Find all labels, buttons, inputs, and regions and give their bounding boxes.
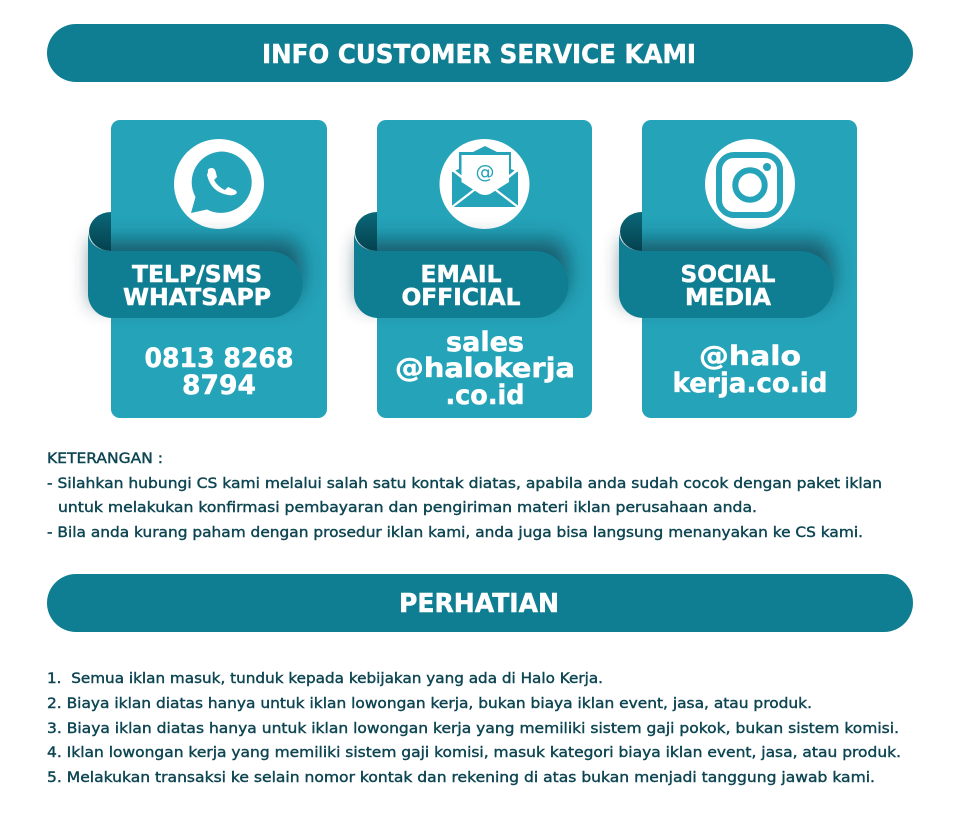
- icon: instagram: [705, 139, 795, 229]
- ribbon: SOCIAL: [680, 262, 776, 288]
- contact text: 0813 8268: [144, 343, 294, 374]
- contact text: kerja.co.id: [672, 368, 828, 399]
- text block: perhatian list: 2. Biaya iklan diatas hanya untuk iklan lowongan kerja, bukan biaya iklan event, jasa, atau produk.: [47, 696, 812, 712]
- panel: telp/sms whatsapp: [88, 120, 327, 418]
- contact text: @halo: [699, 341, 801, 372]
- ribbon: OFFICIAL: [402, 285, 521, 311]
- heading bar: info customer service: INFO CUSTOMER SERVICE KAMI: [262, 40, 696, 70]
- text block: perhatian list: 5. Melakukan transaksi ke selain nomor kontak dan rekening di atas bukan menjadi tanggung jawab kami.: [47, 770, 875, 786]
- ribbon: [354, 212, 568, 318]
- text block: keterangan: - Bila anda kurang paham dengan prosedur iklan kami, anda juga bisa langsung menanyakan ke CS kami.: [47, 525, 863, 541]
- contact text: @halokerja: [395, 353, 575, 384]
- text block: keterangan: untuk melakukan konfirmasi pembayaran dan pengiriman materi iklan perusahaan anda.: [58, 500, 757, 516]
- contact text: .co.id: [446, 380, 524, 411]
- text block: keterangan: [47, 451, 882, 541]
- heading bar: perhatian: PERHATIAN: [399, 589, 559, 619]
- contact text: sales: [446, 327, 524, 358]
- contact text: [395, 327, 575, 411]
- icon: whatsapp: [174, 139, 264, 229]
- text block: keterangan: KETERANGAN :: [47, 451, 163, 467]
- ribbon: [88, 212, 302, 318]
- ribbon: TELP/SMS: [132, 262, 262, 288]
- panel: email official: [354, 120, 592, 418]
- text block: keterangan: - Silahkan hubungi CS kami melalui salah satu kontak diatas, apabila anda sudah cocok dengan paket iklan: [47, 476, 882, 492]
- heading bar: perhatian: [47, 574, 913, 632]
- contact text: [144, 343, 294, 401]
- icon: envelope: [440, 139, 530, 229]
- ribbon: MEDIA: [685, 285, 771, 311]
- ribbon: [619, 212, 834, 318]
- text block: perhatian list: 1. Semua iklan masuk, tunduk kepada kebijakan yang ada di Halo Kerja.: [47, 671, 603, 687]
- ribbon: WHATSAPP: [123, 285, 271, 311]
- text block: perhatian list: [47, 671, 901, 786]
- contact text: [672, 341, 828, 399]
- contact text: 8794: [182, 370, 256, 401]
- panel: social media: [619, 120, 857, 418]
- text block: perhatian list: 3. Biaya iklan diatas hanya untuk iklan lowongan kerja yang memiliki sistem gaji pokok, bukan sistem komisi.: [47, 721, 899, 737]
- icon: envelope: @: [476, 161, 494, 183]
- text block: perhatian list: 4. Iklan lowongan kerja yang memiliki sistem gaji komisi, masuk kategori biaya iklan event, jasa, atau produk.: [47, 745, 901, 761]
- ribbon: EMAIL: [420, 262, 502, 288]
- heading bar: info customer service: [47, 24, 913, 82]
